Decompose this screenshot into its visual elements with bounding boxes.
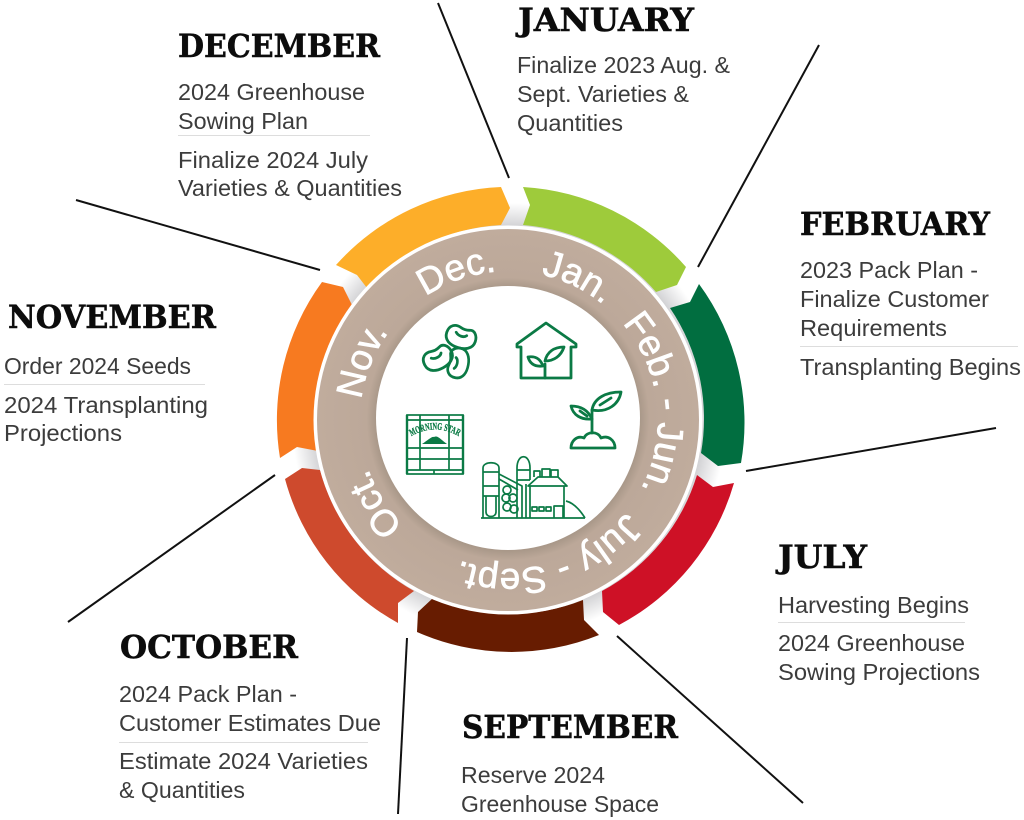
label: Jan.: Jan. bbox=[543, 251, 604, 304]
text block: January: Finalize 2023 Aug. & bbox=[517, 52, 730, 78]
segment: July bbox=[602, 475, 734, 625]
icon: beans bbox=[420, 323, 478, 380]
text block: December: Sowing Plan bbox=[178, 108, 308, 134]
text block: November: Projections bbox=[4, 420, 122, 446]
text block: December bbox=[178, 27, 402, 201]
text block: November: 2024 Transplanting bbox=[4, 392, 208, 418]
gap shadow behind segments bbox=[284, 195, 734, 645]
text block: September bbox=[461, 708, 678, 817]
text block: January: Sept. Varieties & bbox=[517, 81, 689, 107]
label: Feb. - Jun.: Feb. - Jun. bbox=[624, 310, 684, 488]
text block: November: Order 2024 Seeds bbox=[4, 353, 191, 379]
text block: September: Greenhouse Space bbox=[461, 791, 659, 817]
label: Oct.: Oct. bbox=[351, 471, 398, 537]
text block: February: Transplanting Begins bbox=[800, 354, 1021, 380]
text block: February bbox=[800, 205, 1021, 380]
text block: February: Finalize Customer bbox=[800, 286, 989, 312]
icon: greenhouse bbox=[517, 323, 576, 378]
segment: December bbox=[336, 187, 510, 288]
text block: January bbox=[515, 1, 730, 136]
text block: July: Harvesting Begins bbox=[778, 592, 969, 618]
segment: October bbox=[285, 468, 414, 623]
text block: July: 2024 Greenhouse bbox=[778, 630, 965, 656]
white outline around tan ring bbox=[314, 226, 702, 614]
text block: October bbox=[119, 628, 381, 803]
text block: November bbox=[4, 298, 216, 446]
ring month labels bbox=[336, 251, 684, 594]
segmented month ring bbox=[277, 187, 745, 652]
text block: December: Finalize 2024 July bbox=[178, 147, 369, 173]
text block: July: Sowing Projections bbox=[778, 659, 980, 685]
heading: November: NOVEMBER bbox=[8, 298, 216, 336]
segment: February bbox=[670, 284, 745, 466]
tan ring bbox=[317, 229, 699, 611]
label: July - Sept.: July - Sept. bbox=[461, 515, 641, 594]
text block: October: Estimate 2024 Varieties bbox=[119, 748, 368, 774]
text block: October: Customer Estimates Due bbox=[119, 710, 381, 736]
text block: December: Varieties & Quantities bbox=[178, 175, 402, 201]
label: Dec.: Dec. bbox=[415, 254, 494, 295]
text block: January: Quantities bbox=[517, 110, 623, 136]
heading: July: JULY bbox=[775, 538, 868, 576]
segment: January bbox=[523, 187, 686, 292]
bin label: MORNING STAR bbox=[408, 422, 461, 436]
icon: sprout bbox=[571, 392, 621, 448]
text block: October: 2024 Pack Plan - bbox=[119, 681, 297, 707]
text block: December: 2024 Greenhouse bbox=[178, 79, 365, 105]
heading: February: FEBRUARY bbox=[800, 205, 991, 243]
segment: September bbox=[417, 598, 599, 652]
heading: January: JANUARY bbox=[515, 1, 695, 39]
segment: November bbox=[277, 282, 352, 458]
centre circle bbox=[376, 286, 640, 550]
heading: September: SEPTEMBER bbox=[462, 708, 678, 746]
icon: processing plant bbox=[481, 457, 585, 518]
text block: February: 2023 Pack Plan - bbox=[800, 257, 978, 283]
icon: Morning Star bin bbox=[406, 414, 464, 475]
text block: February: Requirements bbox=[800, 315, 947, 341]
text block: October: & Quantities bbox=[119, 777, 245, 803]
label: Nov.: Nov. bbox=[336, 328, 387, 397]
text block: September: Reserve 2024 bbox=[461, 762, 605, 788]
text block: July bbox=[775, 538, 980, 685]
heading: December: DECEMBER bbox=[178, 27, 380, 65]
heading: October: OCTOBER bbox=[120, 628, 298, 666]
